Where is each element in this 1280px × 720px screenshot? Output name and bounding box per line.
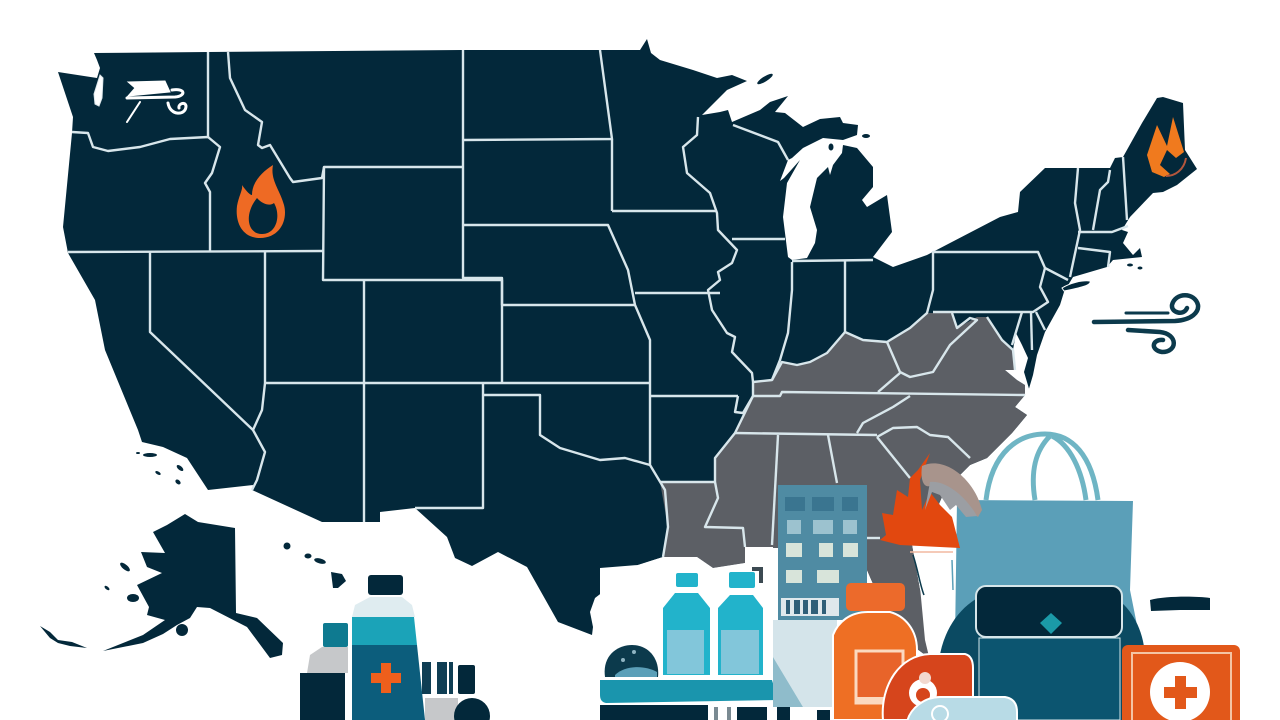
region: southeast states in gray (660, 313, 1027, 660)
Great Lakes islands (756, 72, 870, 150)
backing white panel behind Florida (917, 555, 953, 690)
supplies: orange medicine bottle (833, 583, 917, 720)
smoke plume (921, 463, 982, 517)
supplies: backpack (939, 586, 1145, 720)
supplies: red roll of tape (883, 654, 973, 720)
small bottle body (300, 673, 345, 720)
map: Hawaii (284, 542, 346, 588)
small dark canister (458, 665, 475, 694)
supplies: flame and smoke (880, 453, 982, 552)
water bottle 1 (663, 573, 710, 675)
supplies: emergency reference tablet (778, 485, 867, 620)
icon: flame over Idaho (237, 165, 285, 238)
large bottle band (352, 617, 417, 645)
supplies: pale box under tablet (773, 620, 837, 707)
icon: wind lines off the east coast (1094, 295, 1198, 352)
round dark canister (454, 698, 490, 720)
California channel islands (136, 452, 184, 485)
supplies: first aid kit (1122, 645, 1240, 720)
striped canister (422, 662, 453, 694)
Nantucket islands (1127, 264, 1142, 270)
supplies: tote bag (955, 434, 1140, 640)
map: contiguous United States (58, 39, 1197, 660)
water bottle 2 (718, 572, 763, 675)
large bottle cap (368, 575, 403, 595)
supplies: left group of bottles (300, 575, 490, 720)
orange cross on bottle (371, 663, 401, 693)
backpack flap (976, 586, 1122, 637)
large bottle neck (352, 597, 415, 617)
backpack clasp (1040, 613, 1062, 634)
backpack pocket (979, 638, 1120, 720)
under shelf dark block (600, 705, 708, 720)
small bottle cap (323, 623, 348, 647)
flame base highlight (910, 551, 953, 553)
backpack body (939, 590, 1145, 720)
gray canister (425, 698, 458, 720)
small bottle shoulder (307, 647, 348, 673)
tote body (955, 500, 1140, 640)
icon: flame over Maine (1147, 117, 1186, 177)
map: Alaska (40, 514, 283, 658)
small bracket behind bottle (752, 567, 763, 583)
tote handles (986, 434, 1098, 500)
supplies: center shelf with water bottles (600, 547, 830, 720)
supplies: dark handle (1150, 597, 1210, 611)
icon: white wind swirl over Washington (127, 81, 186, 122)
white backing (600, 547, 773, 720)
Puget Sound (94, 75, 103, 106)
flame (880, 453, 960, 548)
shelf (600, 680, 778, 703)
supplies: lantern outline (913, 555, 953, 595)
supplies: bandage roll (907, 697, 1017, 720)
Long Island (1062, 281, 1090, 291)
round dark helmet (605, 645, 658, 677)
under shelf stripes (714, 707, 830, 720)
Chesapeake Bay (1005, 333, 1030, 395)
state borders (68, 50, 1128, 557)
large bottle body (352, 645, 425, 720)
